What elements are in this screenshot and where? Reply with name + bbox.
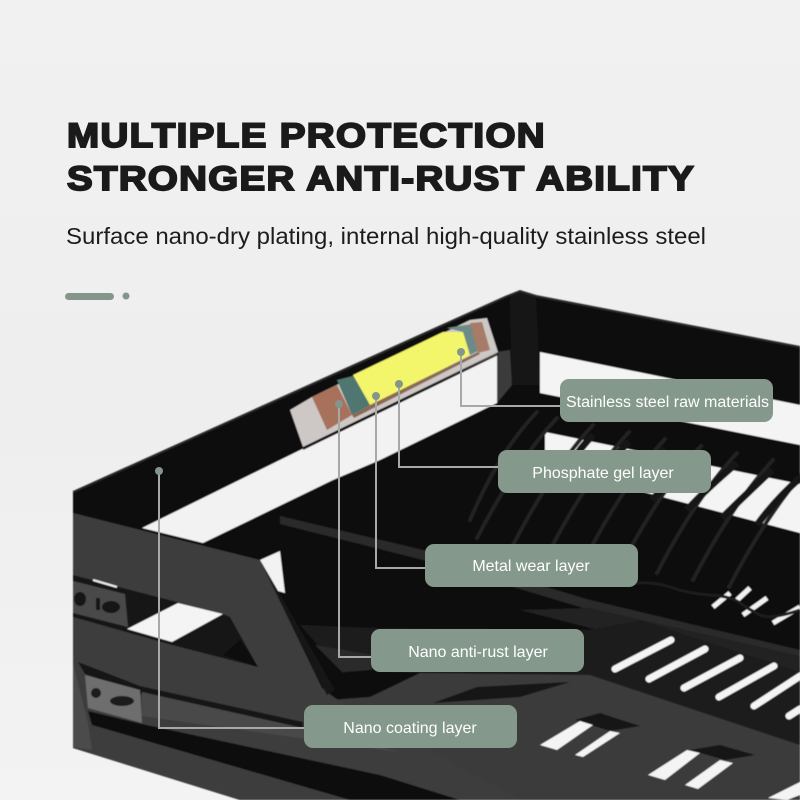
dark strip above bracket 2 xyxy=(78,662,303,730)
triangle cutout xyxy=(223,640,258,667)
label: phosphate xyxy=(498,450,711,493)
label: nano coating: Nano coating layer xyxy=(343,720,477,737)
sliver highlight xyxy=(93,580,117,587)
title xyxy=(67,117,695,198)
label: nano anti-rust xyxy=(371,629,584,672)
corner post xyxy=(510,291,540,385)
label: metal wear: Metal wear layer xyxy=(472,558,590,575)
title: STRONGER ANTI-RUST ABILITY xyxy=(67,160,695,198)
top rail edge xyxy=(73,291,800,492)
rib tops over the white area xyxy=(572,435,800,525)
curvy wire xyxy=(620,583,800,617)
white long slots xyxy=(615,640,800,716)
inner rim xyxy=(280,516,800,658)
small grey floor xyxy=(300,620,800,745)
label: metal wear xyxy=(425,544,638,587)
diagonal shadow xyxy=(260,560,335,695)
shelf band xyxy=(520,608,800,672)
grey post xyxy=(497,350,512,403)
lower quad slots xyxy=(540,721,800,800)
callout lines xyxy=(159,352,560,728)
title: MULTIPLE PROTECTION xyxy=(67,117,546,155)
white area behind ribs xyxy=(545,432,800,533)
rack silhouette xyxy=(73,291,800,800)
decorative pill and dot xyxy=(65,292,130,300)
layered cutaway xyxy=(290,318,498,447)
callout dots xyxy=(155,348,465,475)
label: nano anti-rust: Nano anti-rust layer xyxy=(408,644,548,661)
label: nano coating xyxy=(304,705,517,748)
small gap beside panel xyxy=(260,551,285,593)
gap under right rail xyxy=(540,352,800,445)
lower tray xyxy=(330,673,800,800)
black line under cutaway xyxy=(303,354,498,449)
dish rack photo xyxy=(73,291,800,800)
subtitle: Surface nano-dry plating, internal high-quality stainless steel xyxy=(66,223,706,249)
black triangle by diagonal xyxy=(333,662,400,697)
small gap lower left xyxy=(127,603,223,642)
black band xyxy=(88,711,460,800)
front panel and beam xyxy=(73,513,520,800)
slider xyxy=(142,692,400,752)
bracket 2 xyxy=(85,675,142,723)
left strip xyxy=(73,663,92,750)
label: stainless steel: Stainless steel raw materials xyxy=(566,394,769,411)
bracket 1 xyxy=(73,581,128,627)
panel recess xyxy=(73,575,258,667)
gap under left rail xyxy=(142,353,497,543)
label: stainless steel xyxy=(560,379,773,422)
ribs xyxy=(470,412,800,587)
label: phosphate: Phosphate gel layer xyxy=(532,465,674,482)
small white slots in back xyxy=(713,588,800,623)
